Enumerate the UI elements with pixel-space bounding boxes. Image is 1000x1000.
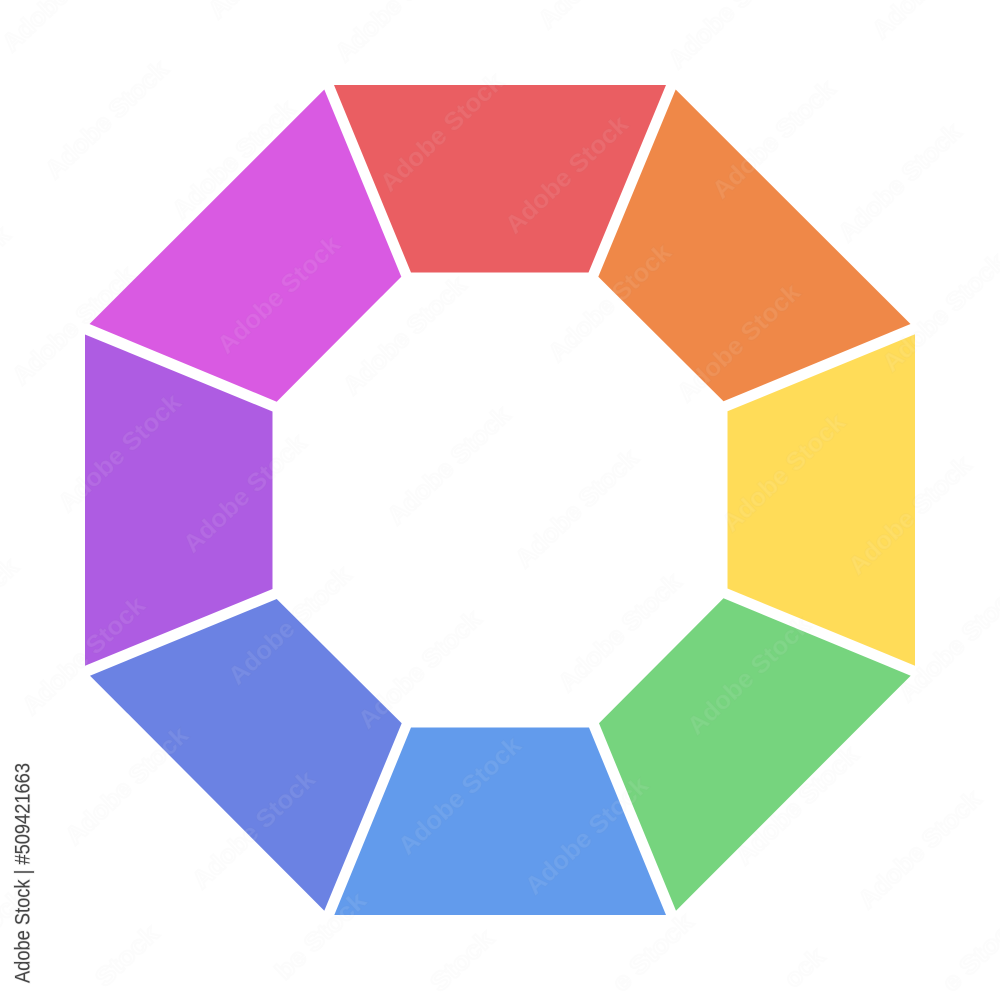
repeated diagonal watermark: Adobe Stock (375, 68, 509, 197)
repeated diagonal watermark: Adobe Stock (553, 568, 687, 697)
repeated diagonal watermark: Adobe Stock (223, 561, 357, 690)
segment: indigo bottom left (90, 599, 402, 911)
repeated diagonal watermark: Adobe Stock (178, 429, 312, 558)
segment: orange top right (598, 90, 910, 401)
repeated diagonal watermark: Adobe Stock (510, 444, 644, 573)
repeated diagonal watermark: Adobe Stock (60, 721, 194, 850)
repeated diagonal watermark: Adobe Stock (730, 741, 864, 870)
repeated diagonal watermark: Adobe Stock (187, 765, 321, 894)
repeated diagonal watermark: Adobe Stock (833, 118, 967, 247)
repeated diagonal watermark: Stock (90, 920, 164, 992)
repeated diagonal watermark: Adobe Stock (167, 95, 301, 224)
repeated diagonal watermark: Adobe Stock (53, 388, 187, 517)
repeated diagonal watermark: Adobe Stock (393, 731, 527, 860)
repeated diagonal watermark: Adobe Stock (382, 401, 516, 530)
repeated diagonal watermark: Adobe Stock (843, 451, 977, 580)
segment: blue bottom (334, 728, 666, 915)
segment: yellow right (728, 334, 915, 666)
repeated diagonal watermark: ock (779, 943, 830, 993)
repeated diagonal watermark: Adobe Stock (543, 238, 677, 367)
repeated diagonal watermark: Adobe Stock (7, 261, 141, 390)
segment: magenta top left (90, 90, 401, 402)
repeated diagonal watermark: e Stock (607, 908, 699, 997)
repeated diagonal watermark: Adobe Stock (520, 771, 654, 900)
repeated diagonal watermark: Stock (425, 925, 499, 997)
repeated diagonal watermark: Adobe Stock (40, 55, 174, 184)
repeated diagonal watermark: Adobe Stock (707, 75, 841, 204)
repeated diagonal watermark: Adobe Stock (17, 591, 151, 720)
stock id text: Adobe Stock | #509421663 (12, 763, 34, 983)
repeated diagonal watermark: Adobe Stock (338, 271, 472, 400)
segment: red top (334, 85, 666, 272)
repeated diagonal watermark: Adobe Stock (853, 785, 987, 914)
segment: green bottom right (599, 598, 911, 911)
repeated diagonal watermark: Adobe Stock (717, 408, 851, 537)
repeated diagonal watermark: Adobe Stock (353, 605, 487, 734)
segment: violet left (85, 334, 272, 666)
repeated diagonal watermark: Adobe Stock (500, 110, 634, 239)
repeated diagonal watermark: Adobe Stock (682, 611, 816, 740)
repeated diagonal watermark: Adobe Stock (212, 230, 346, 359)
repeated diagonal watermark: be Stock (270, 886, 372, 985)
repeated diagonal watermark: Adobe Stock (672, 278, 806, 407)
